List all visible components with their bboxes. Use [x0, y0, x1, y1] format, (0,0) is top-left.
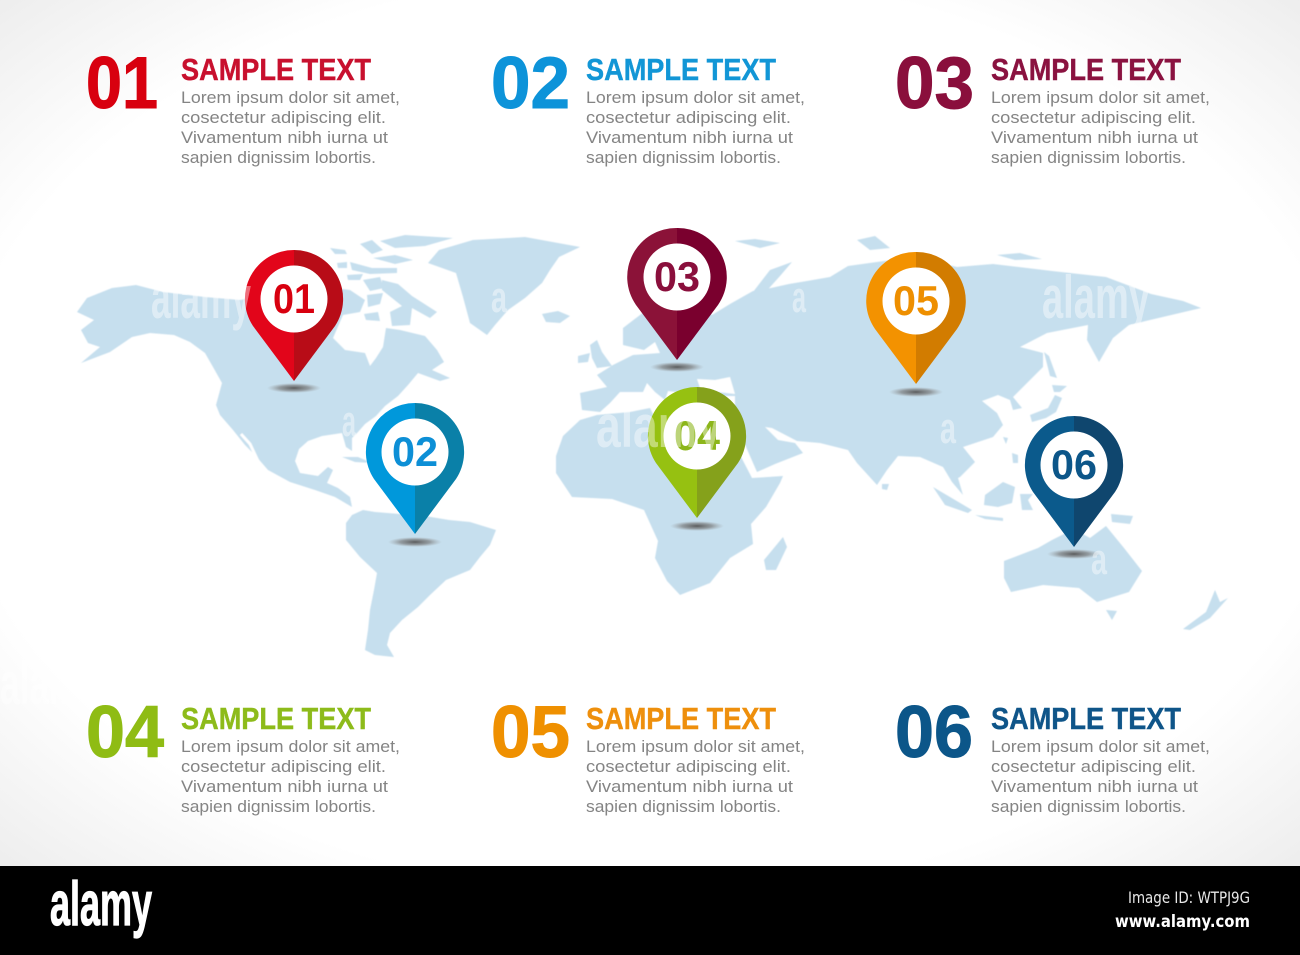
- Black Sea: [697, 377, 735, 394]
- body 06: Lorem ipsum dolor sit amet,: [991, 737, 1210, 756]
- number 06: 06: [895, 692, 973, 773]
- body 06: Vivamentum nibh iurna ut: [991, 777, 1198, 796]
- pin 06: 06: [1051, 441, 1097, 488]
- footer bar: [0, 866, 1300, 955]
- Madagascar: [764, 537, 787, 570]
- body 04: Vivamentum nibh iurna ut: [181, 777, 388, 796]
- body 03: [991, 88, 1210, 167]
- heading 03: SAMPLE TEXT: [991, 52, 1181, 87]
- body 02: cosectetur adipiscing elit.: [586, 108, 791, 127]
- pin 05: 05: [893, 277, 939, 324]
- Australia: [1004, 526, 1142, 602]
- pin 05 shadow: [889, 387, 943, 397]
- pin 04: [648, 387, 746, 531]
- watermarks: alamy: [596, 393, 722, 460]
- number 04: 04: [86, 692, 164, 773]
- heading 04: SAMPLE TEXT: [181, 701, 371, 736]
- North America: [77, 285, 450, 507]
- item 01: [86, 43, 400, 167]
- pin 02: 02: [392, 428, 438, 475]
- footer logo: alamy: [50, 870, 152, 939]
- body 05: sapien dignissim lobortis.: [586, 797, 781, 816]
- Gulf of California: [241, 434, 258, 461]
- pin 04: 04: [674, 412, 721, 459]
- body 05: Lorem ipsum dolor sit amet,: [586, 737, 805, 756]
- watermarks: a: [792, 273, 806, 322]
- item 05: [491, 692, 805, 816]
- body 02: Lorem ipsum dolor sit amet,: [586, 88, 805, 107]
- body 03: sapien dignissim lobortis.: [991, 148, 1186, 167]
- body 04: sapien dignissim lobortis.: [181, 797, 376, 816]
- pin 01: [245, 250, 343, 393]
- heading 05: SAMPLE TEXT: [586, 701, 776, 736]
- Arctic islands: [330, 235, 570, 326]
- Greenland: [428, 237, 580, 335]
- body 01: Vivamentum nibh iurna ut: [181, 128, 388, 147]
- pin 01: 01: [273, 275, 315, 322]
- watermarks: alamy: [151, 264, 251, 331]
- image id: Image ID: WTPJ9G: [1128, 888, 1250, 907]
- body 05: cosectetur adipiscing elit.: [586, 757, 791, 776]
- number 03: 03: [895, 43, 974, 124]
- watermarks: [0, 264, 1150, 717]
- pin 04 shadow: [670, 521, 724, 531]
- pin 03 shadow: [650, 362, 704, 372]
- pin 02: [366, 403, 464, 547]
- item 04: [86, 692, 400, 816]
- body 03: Lorem ipsum dolor sit amet,: [991, 88, 1210, 107]
- body 05: Vivamentum nibh iurna ut: [586, 777, 793, 796]
- watermarks: a: [342, 397, 356, 446]
- world map: [77, 235, 1228, 657]
- South America: [346, 510, 496, 657]
- pin 06 shadow: [1047, 549, 1101, 559]
- body 03: cosectetur adipiscing elit.: [991, 108, 1196, 127]
- Africa: [556, 408, 783, 595]
- heading 01: SAMPLE TEXT: [181, 52, 371, 87]
- body 04: Lorem ipsum dolor sit amet,: [181, 737, 400, 756]
- website: www.alamy.com: [1115, 912, 1250, 932]
- watermarks: a: [940, 404, 956, 453]
- pin 02 shadow: [388, 537, 442, 547]
- item 06: [895, 692, 1210, 816]
- body 06: [991, 737, 1210, 816]
- body 02: Vivamentum nibh iurna ut: [586, 128, 793, 147]
- body 01: [181, 88, 400, 167]
- body 02: sapien dignissim lobortis.: [586, 148, 781, 167]
- pin 05: [866, 252, 966, 397]
- pin 06: [1025, 416, 1123, 559]
- Eurasia: [580, 257, 1201, 495]
- watermarks: alamy: [1042, 264, 1150, 331]
- heading 02: SAMPLE TEXT: [586, 52, 776, 87]
- body 05: [586, 737, 805, 816]
- body 06: sapien dignissim lobortis.: [991, 797, 1186, 816]
- pin 03: [627, 228, 727, 372]
- pin 01 shadow: [267, 383, 321, 393]
- number 05: 05: [491, 692, 570, 773]
- item 02: [491, 43, 805, 167]
- body 01: sapien dignissim lobortis.: [181, 148, 376, 167]
- body 04: cosectetur adipiscing elit.: [181, 757, 386, 776]
- watermarks: a: [491, 273, 507, 322]
- body 01: Lorem ipsum dolor sit amet,: [181, 88, 400, 107]
- body 02: [586, 88, 805, 167]
- pin 03: 03: [654, 253, 700, 300]
- number 01: 01: [86, 43, 158, 124]
- body 04: [181, 737, 400, 816]
- heading 06: SAMPLE TEXT: [991, 701, 1181, 736]
- item 03: [895, 43, 1210, 167]
- body 03: Vivamentum nibh iurna ut: [991, 128, 1198, 147]
- watermarks: a: [1091, 535, 1107, 584]
- body 06: cosectetur adipiscing elit.: [991, 757, 1196, 776]
- watermarks: alamy: [0, 650, 100, 717]
- number 02: 02: [491, 43, 570, 124]
- Islands: [342, 236, 1228, 630]
- body 01: cosectetur adipiscing elit.: [181, 108, 386, 127]
